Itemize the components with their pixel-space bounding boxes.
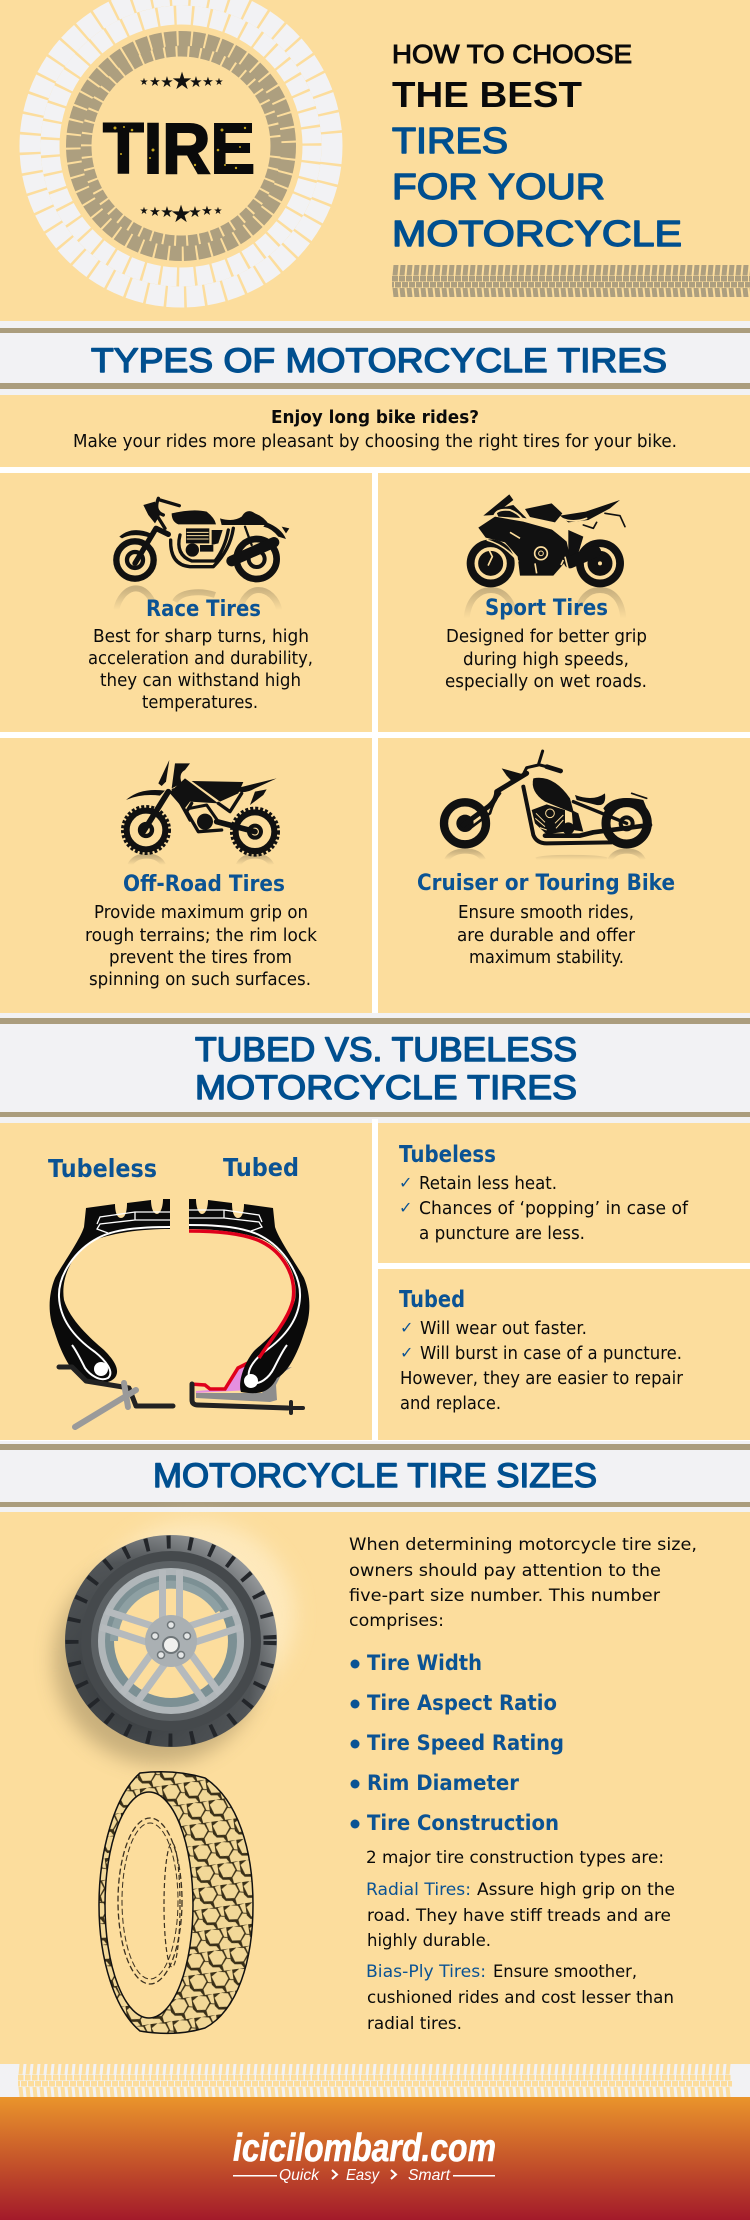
top stars: ★ [140,77,149,88]
text: cruiser description [457,902,636,968]
bullet list of size parts: Tire Construction [367,1811,559,1835]
icon: cruiser bike [444,751,650,860]
text: construction types: radial tires. [367,2014,462,2034]
diagram: tubeless half [50,1199,173,1427]
heading: types of motorcycle tires: TYPES OF MOTORCYCLE TIRES [91,342,667,380]
top stars: ★ [149,75,161,90]
diagram: tubed half [189,1199,309,1413]
text: tubeless list: a puncture are less. [419,1223,585,1244]
text: tubed list [400,1318,684,1414]
text: tubed list: Will wear out faster. [420,1318,587,1339]
panel: tire sizes [0,1512,750,2064]
panel: sport tires [378,473,750,732]
heading: tubed vs tubeless: TUBED VS. TUBELESS [195,1031,577,1069]
text: tubeless list: Chances of ‘popping’ in case of [419,1198,689,1219]
icon: off-road bike [123,760,278,865]
panel: tubeless notes [378,1123,750,1263]
icon: sport bike [467,494,625,618]
text: off-road tires description: Provide maximum grip on [94,902,308,923]
bottom stars: ★ [188,203,202,221]
panel: race tires [0,473,372,732]
tread strip [392,265,750,297]
text: tubed list: Will burst in case of a puncture. [420,1343,682,1364]
label: tubeless: Tubeless [48,1154,157,1183]
top stars: ★ [160,73,174,91]
top stars: ★ [202,75,214,90]
text: off-road tires description: prevent the tires from [109,947,292,968]
main title [392,39,682,254]
heading: tubed: Tubed [399,1287,465,1313]
top stars: ★ [189,73,203,91]
heading: tubed vs tubeless: MOTORCYCLE TIRES [195,1069,577,1107]
footer tagline: Quick [279,2167,320,2184]
bullet list of size parts: Tire Width [367,1651,482,1675]
intro panel: Make your rides more pleasant by choosing the right tires for your bike. [73,431,677,452]
top stars: ★ [215,77,224,88]
main title: THE BEST [392,74,582,115]
bottom stars [140,200,223,228]
text: off-road tires description: rough terrains; the rim lock [85,925,318,946]
bullet list of size parts: Tire Speed Rating [367,1731,564,1755]
tire line drawing [99,1772,253,2033]
footer tagline: Easy [346,2167,380,2184]
text: tubed list: ✓ [400,1343,413,1362]
main title: FOR YOUR [392,166,605,207]
text: tubed list: and replace. [400,1393,501,1414]
text: sport tires description: Designed for better grip [446,626,647,647]
text: construction types: Ensure smoother, [493,1962,637,1982]
text: construction types [366,1848,675,2034]
text: construction types: cushioned rides and cost lesser than [367,1988,674,2008]
top stars: ★ [171,67,193,95]
tire logo badge [30,0,332,297]
heading: tubed vs tubeless [195,1031,577,1107]
footer tread strip [18,2064,732,2097]
text: tubeless list: Retain less heat. [419,1173,557,1194]
panel: tire cross-section diagram [0,1123,372,1440]
panel: cruiser or touring bike [378,738,750,1013]
label: tubed: Tubed [223,1153,299,1182]
text: cruiser description: maximum stability. [469,947,624,968]
text: construction types: road. They have stiff treads and are [367,1906,671,1926]
text: race tires description: temperatures. [142,692,258,713]
text: cruiser description: Ensure smooth rides, [458,902,634,923]
text: sport tires description [445,626,647,692]
heading: race tires: Race Tires [146,597,261,622]
bullet list of size parts: Rim Diameter [367,1771,520,1795]
bottom stars: ★ [140,206,149,217]
main title: MOTORCYCLE [392,213,682,254]
text: sport tires description: especially on wet roads. [445,671,647,692]
wheel photo [54,1520,295,1764]
text: race tires description [88,626,313,713]
text: tubed list: However, they are easier to repair [400,1368,684,1389]
heading: sport tires: Sport Tires [485,596,608,621]
text: tubeless list [399,1173,689,1244]
footer tagline: Smart [408,2167,451,2184]
text: size intro: comprises: [349,1611,444,1631]
top stars [140,67,224,95]
footer tagline [233,2167,495,2184]
footer [0,2097,750,2220]
bullet list of size parts [350,1651,564,1835]
intro panel [0,395,750,467]
header panel [0,0,750,321]
text: tubeless list: ✓ [399,1198,412,1217]
heading: off-road tires: Off-Road Tires [123,872,285,897]
heading: tubeless: Tubeless [399,1142,496,1168]
heading: motorcycle tire sizes: MOTORCYCLE TIRE SIZES [153,1457,597,1495]
bottom stars: ★ [214,206,223,217]
text: race tires description: Best for sharp turns, high [93,626,309,647]
text: sport tires description: during high speeds, [463,649,629,670]
footer brand: icicilombard.com [233,2127,496,2170]
text: tubed list: ✓ [400,1318,413,1337]
intro panel: Enjoy long bike rides? [271,407,479,428]
text: size intro: When determining motorcycle tire size, [349,1535,697,1555]
bottom stars: ★ [149,205,161,220]
main title: HOW TO CHOOSE [392,39,632,69]
text: construction types: 2 major tire construction types are: [366,1848,664,1868]
bottom stars: ★ [160,203,174,221]
text: off-road tires description: spinning on such surfaces. [89,969,311,990]
text: tubeless list: ✓ [399,1173,412,1192]
panel: off-road tires [0,738,372,1013]
text: construction types: Radial Tires: [366,1880,471,1900]
text: size intro: owners should pay attention to the [349,1561,661,1581]
text: race tires description: they can withstand high [100,670,301,691]
text: size intro [349,1535,697,1631]
text: off-road tires description [85,902,318,990]
icon: race bike [116,498,289,610]
logo word TIRE: TIRE [103,110,255,189]
bottom stars: ★ [201,204,213,219]
text: construction types: Bias-Ply Tires: [366,1962,486,1982]
text: cruiser description: are durable and offer [457,925,636,946]
bottom stars: ★ [170,200,192,228]
heading: cruiser or touring bike: Cruiser or Touring Bike [417,871,675,896]
main title: TIRES [392,120,508,161]
panel: tubed notes [378,1269,750,1440]
text: race tires description: acceleration and durability, [88,648,313,669]
text: construction types: highly durable. [367,1931,491,1951]
bullet list of size parts: Tire Aspect Ratio [367,1691,557,1715]
text: construction types: Assure high grip on the [477,1880,675,1900]
text: size intro: five-part size number. This number [349,1586,660,1606]
